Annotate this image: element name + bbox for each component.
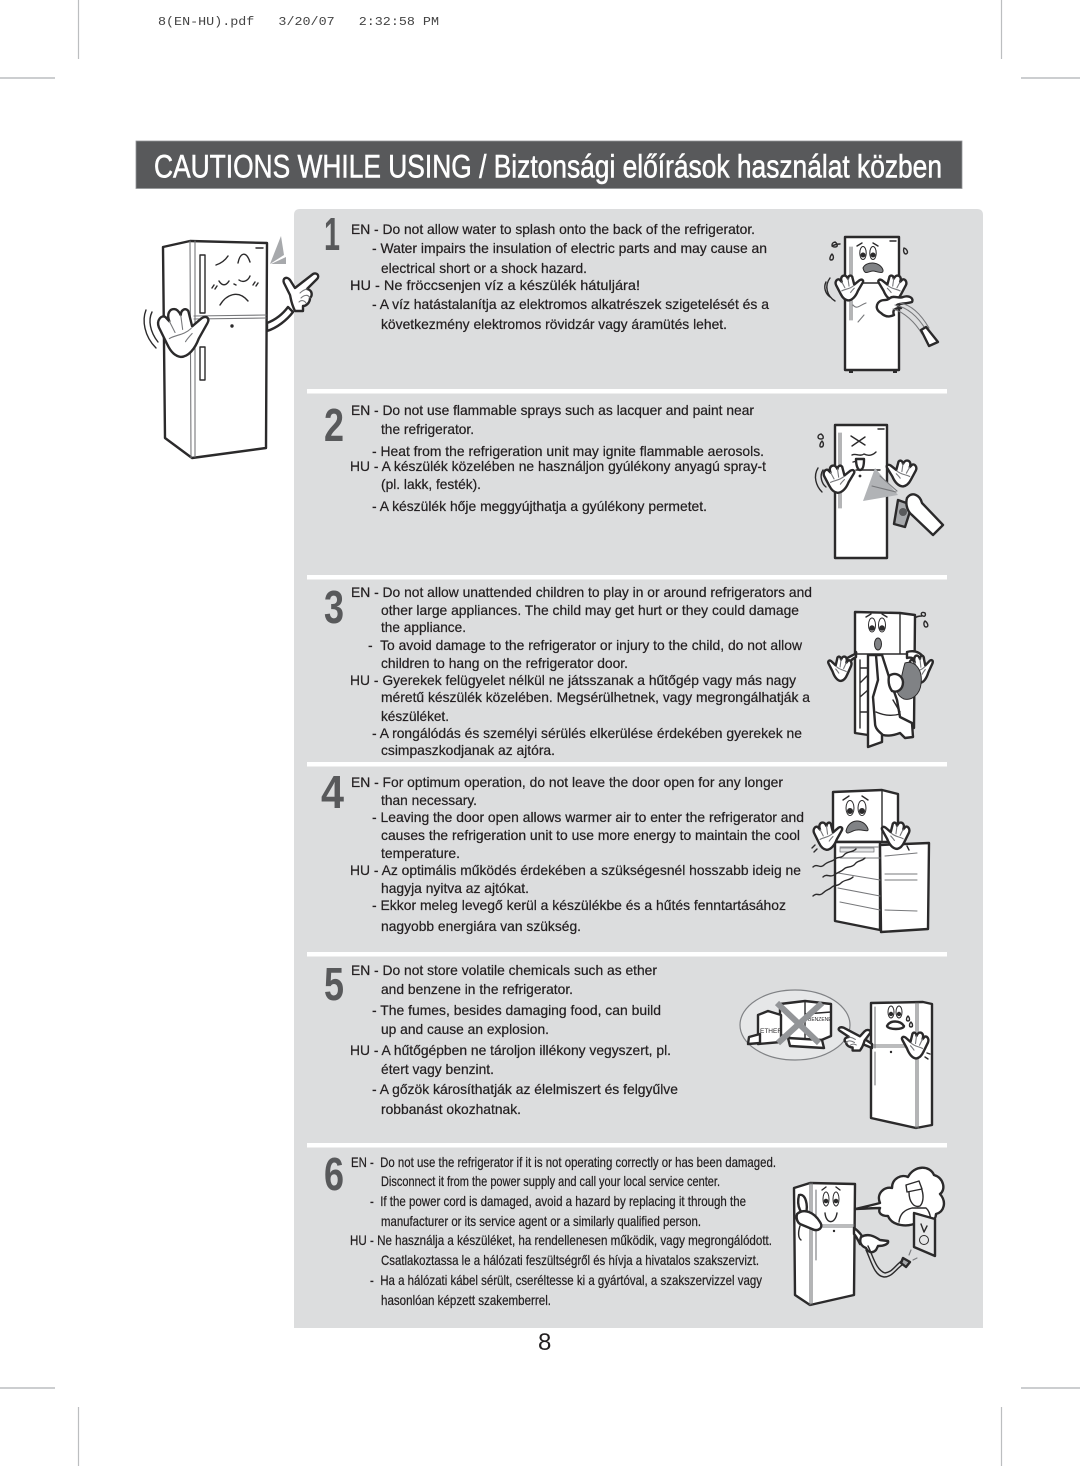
step 1 text: - Water impairs the insulation of electric parts and may cause an <box>372 240 767 256</box>
step 3 text: csimpaszkodjanak az ajtóra. <box>381 742 555 758</box>
step 2 text: (pl. lakk, festék). <box>381 476 481 492</box>
step 1 text: - A víz hatástalanítja az elektromos alkatrészek szigetelését és a <box>372 296 769 312</box>
step 6 text: manufacturer or its service agent or a similarly qualified person. <box>381 1214 701 1229</box>
step 5 <box>324 958 932 1128</box>
illustration: refrigerator with door left open <box>812 790 929 932</box>
step 5 text: étert vagy benzint. <box>381 1061 494 1077</box>
step 4 text <box>350 774 804 934</box>
step 3 text: other large appliances. The child may get hurt or they could damage <box>381 602 799 618</box>
title banner <box>136 141 962 188</box>
step 5 text: - The fumes, besides damaging food, can build <box>372 1002 661 1018</box>
step 3 text: EN - Do not allow unattended children to play in or around refrigerators and <box>351 584 812 600</box>
step 3 text: méretű készülék közelében. Megsérülhetnek, vagy megrongálhatják a <box>381 689 810 705</box>
step 3 <box>324 581 933 758</box>
step 5 text: and benzene in the refrigerator. <box>381 981 573 997</box>
step 6 text: - Ha a hálózati kábel sérült, cseréltesse ki a gyártóval, a szakszervizzel vagy <box>370 1273 762 1288</box>
illustration: child hanging on refrigerator door <box>828 612 933 747</box>
step 4 text: HU - Az optimális működés érdekében a szükségesnél hosszabb ideig ne <box>350 862 801 878</box>
illustration: refrigerator and flammable spray <box>815 425 943 558</box>
step 3 text: - To avoid damage to the refrigerator or injury to the child, do not allow <box>368 637 803 653</box>
step 1 text: electrical short or a shock hazard. <box>381 260 587 276</box>
step 3 text: children to hang on the refrigerator door. <box>381 655 628 671</box>
step 2 text: - A készülék hője meggyújthatja a gyúlékony permetet. <box>372 498 707 514</box>
step 3 text <box>350 584 812 758</box>
step 2 text <box>350 402 766 514</box>
step 3 text: HU - Gyerekek felügyelet nélkül ne játsszanak a hűtőgép vagy más nagy <box>350 672 796 688</box>
step 6 text: Csatlakoztassa le a hálózati feszültségről és hívja a hivatalos szakszervizt. <box>381 1253 759 1268</box>
step 2 text: EN - Do not use flammable sprays such as lacquer and paint near <box>351 402 754 418</box>
illustration: chemicals crossed out: BENZENE <box>808 1017 832 1023</box>
step 1 text: HU - Ne fröccsenjen víz a készülék hátuljára! <box>350 277 640 293</box>
step 5 text: EN - Do not store volatile chemicals such as ether <box>351 962 657 978</box>
step 6 text: HU - Ne használja a készüléket, ha rendellenesen működik, vagy megrongálódott. <box>350 1233 772 1248</box>
step 1 <box>324 208 938 372</box>
step 1 text <box>350 221 769 332</box>
illustration: chemicals crossed out: ETHER <box>760 1028 782 1035</box>
illustration: chemicals crossed out <box>740 990 932 1128</box>
step 3 text: készüléket. <box>381 708 449 724</box>
step 6 text: Disconnect it from the power supply and call your local service center. <box>381 1174 720 1189</box>
step 4 text: hagyja nyitva az ajtókat. <box>381 880 529 896</box>
step 2 <box>324 399 943 558</box>
step 3 text: the appliance. <box>381 619 466 635</box>
number 3: 3 <box>324 581 344 633</box>
step 6 text: hasonlóan képzett szakemberrel. <box>381 1293 551 1308</box>
step 2 text: HU - A készülék közelében ne használjon gyúlékony anyagú spray-t <box>350 458 766 474</box>
step 3 text: - A rongálódás és személyi sérülés elkerülése érdekében gyerekek ne <box>372 725 802 741</box>
step 4 text: temperature. <box>381 845 460 861</box>
step 6 <box>324 1148 944 1308</box>
step 4 text: causes the refrigeration unit to use more energy to maintain the cool <box>381 827 800 843</box>
file stamp: 8(EN-HU).pdf 3/20/07 2:32:58 PM <box>158 15 439 29</box>
step 4 text: nagyobb energiára van szükség. <box>381 918 581 934</box>
panel: cautions background <box>294 209 983 1328</box>
number 2: 2 <box>324 399 344 451</box>
illustration: refrigerator splashed by water <box>825 237 938 372</box>
step 6 text <box>350 1155 776 1308</box>
step 6 text: EN - Do not use the refrigerator if it is not operating correctly or has been damaged. <box>351 1155 776 1170</box>
step 4 text: EN - For optimum operation, do not leave the door open for any longer <box>351 774 783 790</box>
step 5 text: - A gőzök károsíthatják az élelmiszert és felgyűlve <box>372 1081 678 1097</box>
step 6 text: - If the power cord is damaged, avoid a hazard by replacing it through the <box>370 1194 746 1209</box>
step 5 text: up and cause an explosion. <box>381 1021 549 1037</box>
step 5 text: robbanást okozhatnak. <box>381 1101 521 1117</box>
illustration: main worried refrigerator <box>144 236 318 458</box>
number 4: 4 <box>321 766 344 818</box>
step 1 text: EN - Do not allow water to splash onto the back of the refrigerator. <box>351 221 755 237</box>
page number: 8 <box>538 1329 551 1356</box>
step 4 text: than necessary. <box>381 792 477 808</box>
step 4 text: - Leaving the door open allows warmer air to enter the refrigerator and <box>372 809 804 825</box>
number 1: 1 <box>324 208 340 260</box>
step 5 text <box>350 962 678 1117</box>
number 5: 5 <box>324 958 344 1010</box>
illustration: refrigerator calling service centre <box>794 1168 944 1305</box>
number 6: 6 <box>324 1148 344 1200</box>
step 4 <box>321 766 929 934</box>
step 2 text: - Heat from the refrigeration unit may ignite flammable aerosols. <box>372 443 764 459</box>
step 1 text: következmény elektromos rövidzár vagy áramütés lehet. <box>381 316 727 332</box>
step 5 text: HU - A hűtőgépben ne tároljon illékony vegyszert, pl. <box>350 1042 671 1058</box>
step 4 text: - Ekkor meleg levegő kerül a készülékbe és a hűtés fenntartásához <box>372 897 786 913</box>
step 2 text: the refrigerator. <box>381 421 474 437</box>
